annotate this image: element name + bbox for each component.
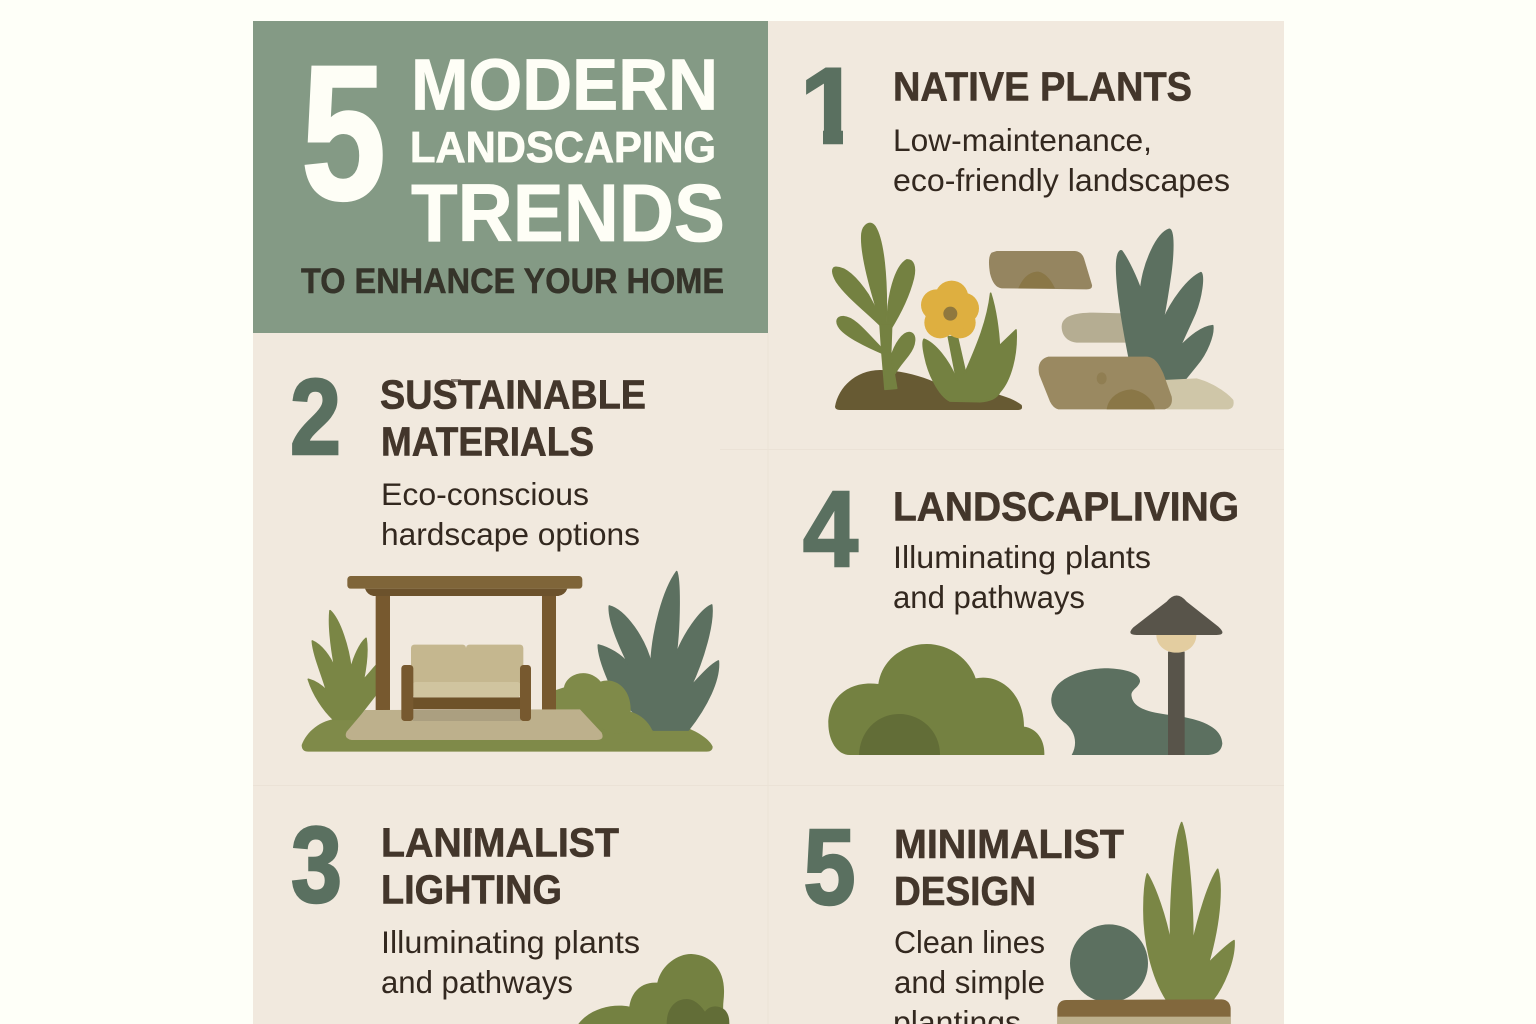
subtitle: TO ENHANCE YOUR HOME	[301, 262, 724, 301]
panel: trend 3 landscape lighting	[291, 804, 729, 1024]
heading: sustainable materials: MATERIALS	[381, 418, 594, 464]
panel: title header	[253, 21, 768, 333]
panel: trend 2 sustainable materials	[290, 356, 718, 752]
heading: sustainable materials: SUSTAINABLE	[380, 372, 646, 418]
description: minimalist design: Clean lines	[894, 924, 1045, 960]
number 5: 5	[804, 806, 856, 927]
description: landscape lighting: and pathways	[893, 579, 1085, 615]
description: sustainable materials: Eco-conscious	[381, 476, 589, 512]
description: landscape lighting: Illuminating plants	[893, 539, 1151, 575]
number 4: 4	[803, 468, 858, 589]
description: lighting: Illuminating plants	[381, 924, 640, 960]
heading: native plants: NATIVE PLANTS	[893, 64, 1192, 110]
heading: lanimalist lighting: LANIMALIST	[381, 820, 619, 866]
title: trends: TRENDS	[411, 168, 725, 259]
panel: trend 1 native plants	[795, 45, 1234, 410]
illustration: sphere, plant and planter	[1057, 823, 1234, 1024]
illustration: pergola with sofa and plants	[302, 572, 718, 752]
number 2: 2	[290, 356, 341, 477]
heading: landscapliving: LANDSCAPLIVING	[893, 484, 1239, 530]
title number 5: 5	[301, 25, 386, 240]
illustration: bush, path and lamp	[828, 595, 1222, 755]
description: sustainable materials: hardscape options	[381, 516, 640, 552]
description: minimalist design: and simple	[894, 964, 1045, 1000]
number 1: 1	[800, 45, 860, 166]
illustration: partial bush	[578, 954, 729, 1024]
heading: minimalist design: DESIGN	[894, 868, 1036, 914]
description: lighting: and pathways	[381, 964, 573, 1000]
description: native plants: eco-friendly landscapes	[893, 162, 1230, 198]
title: modern: MODERN	[411, 46, 718, 126]
title: landscaping: LANDSCAPING	[410, 123, 716, 172]
heading: minimalist design: MINIMALIST	[894, 821, 1124, 867]
description: native plants: Low-maintenance,	[893, 122, 1152, 158]
panel: trend 4 landscape lighting	[803, 468, 1239, 755]
number 3: 3	[291, 804, 342, 925]
illustration: plants, flower and stones	[833, 224, 1234, 410]
panel: card background	[253, 21, 1284, 1024]
heading: lanimalist lighting: LIGHTING	[381, 866, 562, 912]
panel: trend 5 minimalist design	[804, 806, 1234, 1024]
